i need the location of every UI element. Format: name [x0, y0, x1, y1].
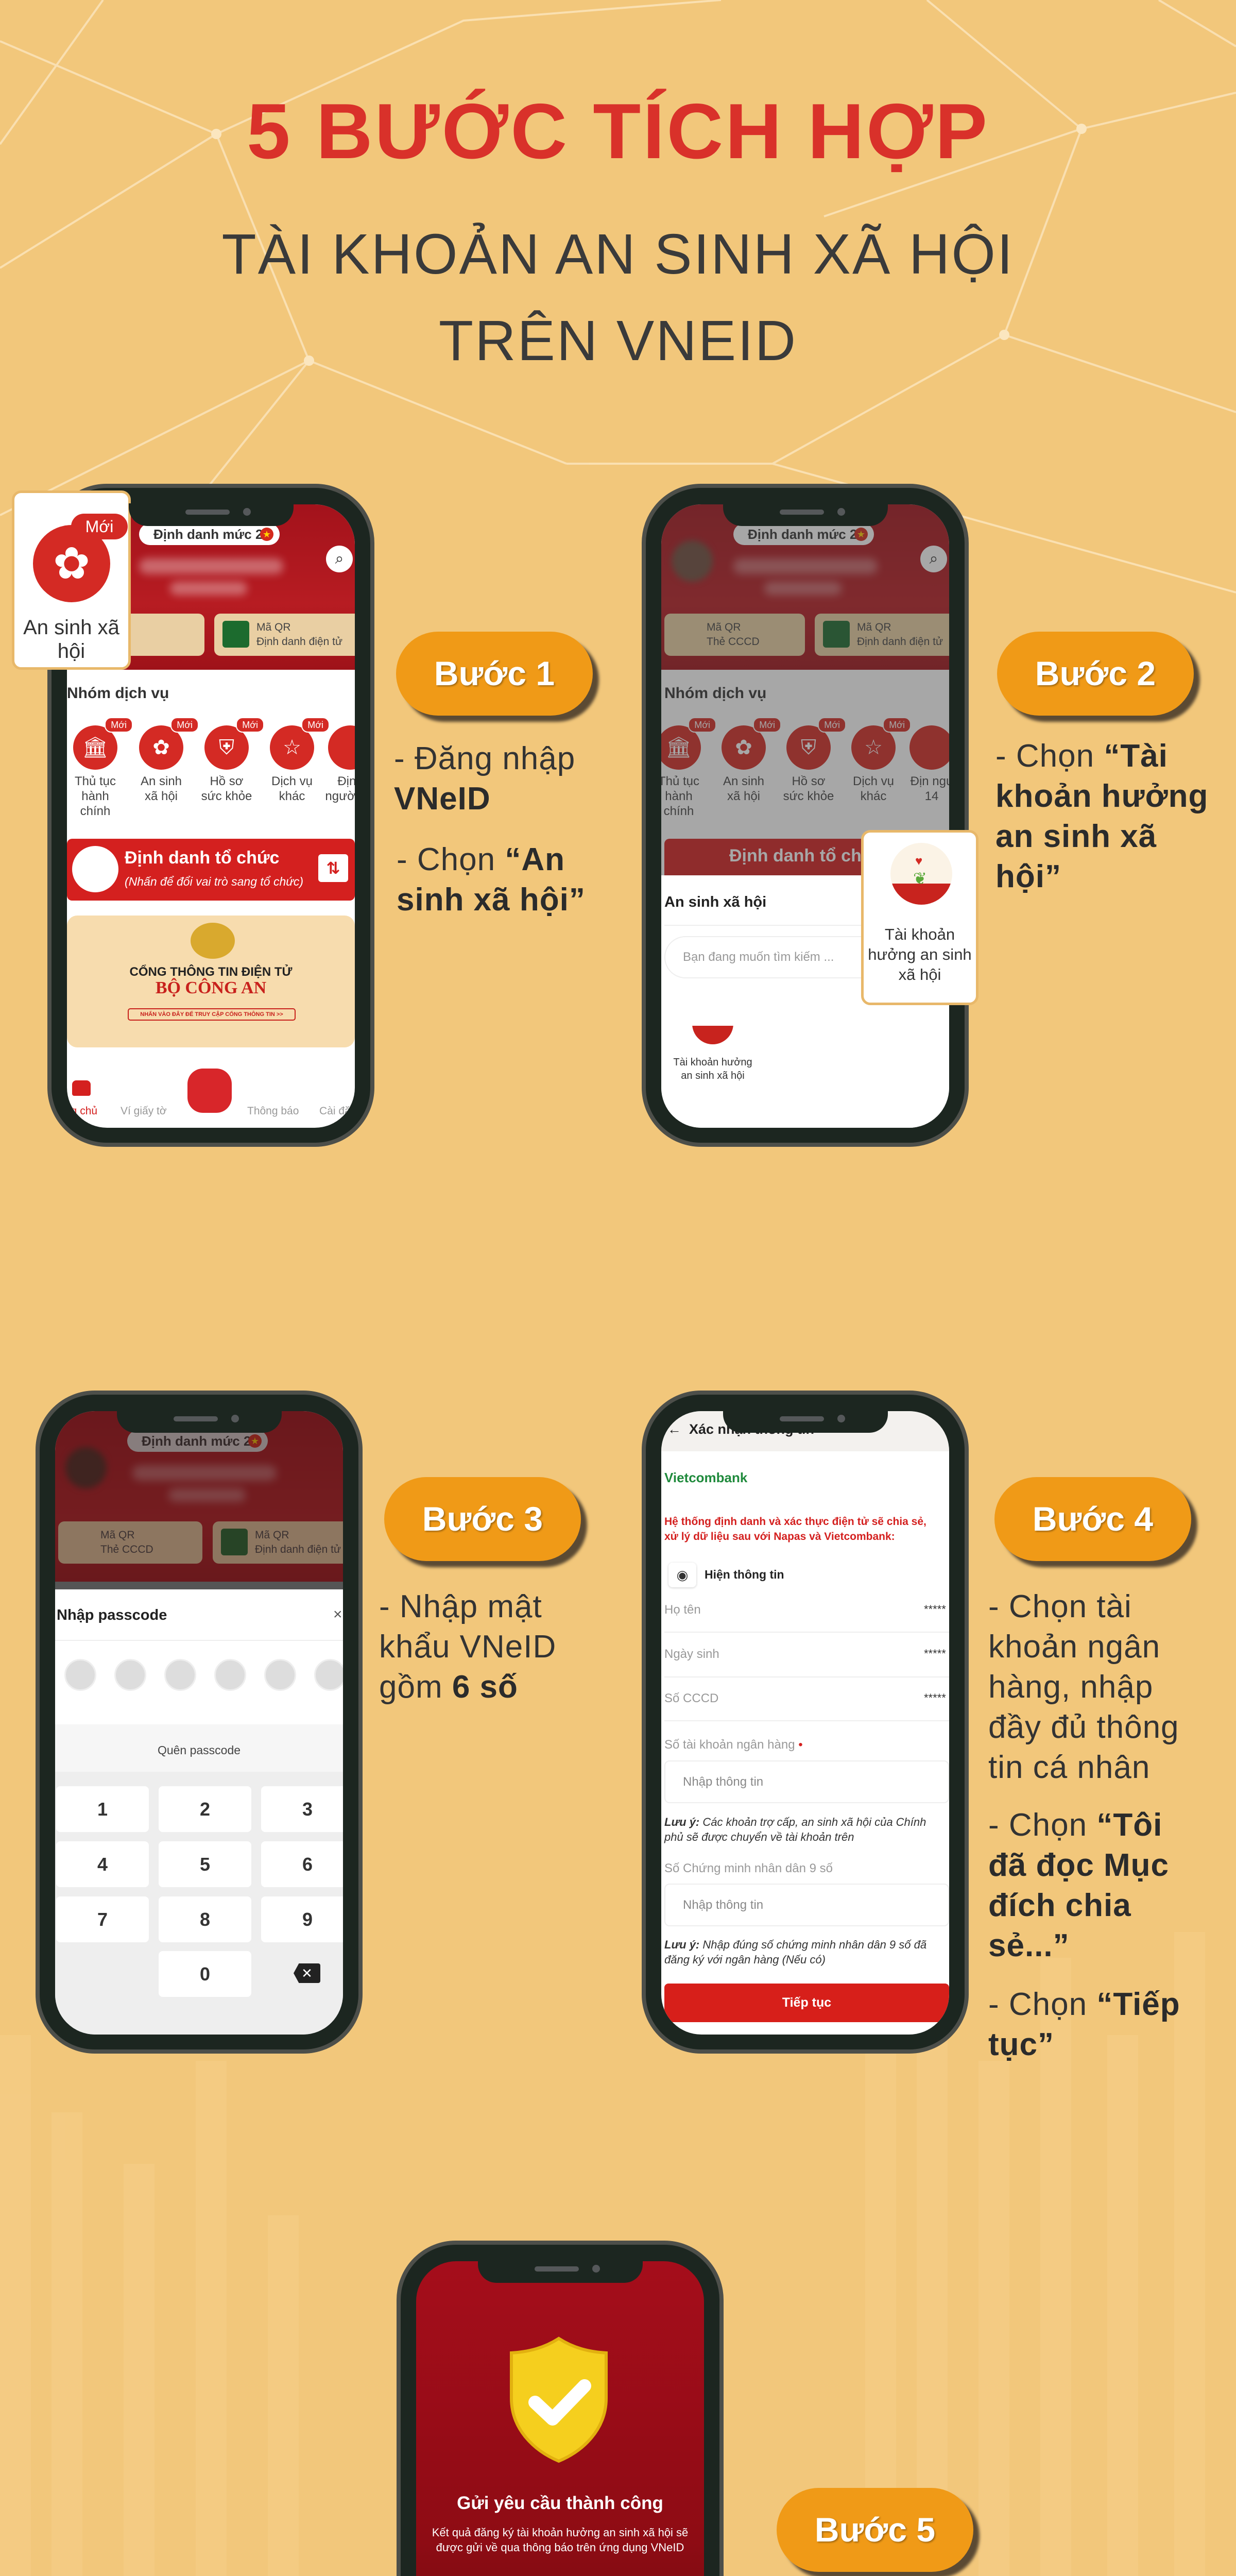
- phone 3: Thẻ CCCD: [100, 1544, 153, 1555]
- phone 1: 🏛: [82, 736, 108, 759]
- bottom sheet: [661, 875, 949, 1128]
- text: - Chọn “Tôi: [988, 1807, 1162, 1843]
- phone 4: Tiếp tục: [782, 1995, 831, 2010]
- keypad: [55, 1772, 343, 2035]
- phone 1: Hồ sơ sức khỏe: [201, 774, 252, 803]
- text: step 4: [988, 1589, 1179, 1785]
- header red: CCCD: [89, 636, 120, 648]
- header red: ★: [263, 529, 271, 539]
- text: step 4: khoản ngân: [988, 1629, 1160, 1665]
- subtitle: TRÊN VNEID: [439, 309, 797, 372]
- phone 4: Họ tên: [664, 1603, 701, 1617]
- pill: buoc 4: [994, 1477, 1191, 1561]
- phone 2: ★: [857, 529, 865, 539]
- phone 2: Mới: [759, 720, 775, 730]
- text: step 2: - Chọn “Tài: [995, 738, 1168, 774]
- phone 4: phủ sẽ được chuyển về tài khoản trên: [664, 1831, 854, 1843]
- phone 3: [36, 1391, 363, 2054]
- text: step 4: tin cá nhân: [988, 1750, 1150, 1785]
- icon: shield: [510, 2337, 608, 2463]
- phone 2: Mã QR: [857, 621, 891, 633]
- text: step 1: - Đăng nhập: [394, 741, 575, 776]
- red banner: Định danh tổ chức: [125, 848, 279, 868]
- keypad: 0: [200, 1963, 210, 1985]
- phone 1: An sinh xã hội: [141, 774, 182, 803]
- portal banner: NHẤN VÀO ĐÂY ĐỂ TRUY CẬP CỔNG THÔNG TIN >>: [140, 1011, 283, 1018]
- red banner: (Nhấn để đổi vai trò sang tổ chức): [125, 875, 303, 888]
- phone 2: ☆: [864, 736, 883, 759]
- phone 4: đăng ký với ngân hàng (Nếu có): [664, 1953, 826, 1966]
- keypad: ✕: [301, 1965, 313, 1981]
- callout: tai khoan huong an sinh: xã hội: [899, 965, 941, 984]
- header red: Định danh điện tử: [256, 636, 342, 648]
- pill: buoc 3: [384, 1477, 581, 1561]
- phone 4: *****: [924, 1603, 946, 1616]
- phone 1: Mới: [307, 720, 323, 730]
- text: - Chọn “Tiếp: [988, 1987, 1180, 2022]
- text: step 3: - Nhập mật: [379, 1589, 542, 1624]
- subtitle: TÀI KHOẢN AN SINH XÃ HỘI: [222, 223, 1014, 286]
- header red: ⌕: [335, 550, 344, 567]
- portal banner: BỘ CÔNG AN: [156, 978, 266, 997]
- keypad: 9: [302, 1909, 313, 1930]
- phone 1: [47, 484, 374, 1147]
- pill: buoc 1: Bước 1: [434, 654, 555, 692]
- phone 2: Mã QR: [707, 621, 741, 633]
- phone 2: Nhóm dịch vụ: [664, 685, 766, 702]
- red banner: [67, 839, 355, 901]
- phone 4: Nhập thông tin: [683, 1898, 763, 1912]
- phone 4: ◉: [677, 1567, 688, 1583]
- keypad: 6: [302, 1854, 313, 1875]
- phone 4: xử lý dữ liệu sau với Napas và Vietcombank:: [664, 1531, 895, 1543]
- phone 4: ← Xác nhận thông tin: [667, 1421, 814, 1437]
- keypad: 1: [97, 1799, 108, 1820]
- keypad: 5: [200, 1854, 210, 1875]
- red banner: ⇅: [327, 859, 340, 877]
- callout: tai khoan huong an sinh: Tài khoản: [885, 925, 955, 943]
- pill: buoc 2: Bước 2: [1035, 654, 1156, 692]
- phone 2: Định danh mức 2: [748, 527, 857, 542]
- phone 2: ⛨: [801, 736, 816, 759]
- callout: tai khoan huong an sinh: [861, 830, 978, 1005]
- keypad: 3: [302, 1799, 313, 1820]
- pill: buoc 4: Bước 4: [1033, 1500, 1153, 1538]
- phone 1: Mới: [111, 720, 127, 730]
- keypad: 4: [97, 1854, 108, 1875]
- text: sẻ...”: [988, 1928, 1070, 1963]
- portal banner: [67, 916, 355, 1047]
- keypad: 8: [200, 1909, 210, 1930]
- phone 2: An sinh xã hội: [723, 774, 764, 803]
- phone 5: [397, 2241, 724, 2576]
- phone 4: Nhập thông tin: [683, 1775, 763, 1789]
- phone 5: được gửi về qua thông báo trên ứng dụng VNeID: [436, 2541, 684, 2554]
- phone 4: [642, 1391, 969, 2054]
- dim overlay: [661, 504, 949, 875]
- title: 5 BƯỚC TÍCH HỢP: [247, 88, 989, 175]
- bottom sheet: Tài khoản hưởng an sinh xã hội: [673, 1057, 752, 1081]
- phone 1: Dịch vụ khác: [271, 774, 313, 803]
- header red: Định danh mức 2: [153, 527, 263, 542]
- phone 2: Hồ sơ sức khỏe: [783, 774, 834, 803]
- phone 3: ×: [333, 1606, 342, 1623]
- phone 3: Mã QR: [255, 1529, 289, 1541]
- phone 2: Mới: [889, 720, 905, 730]
- phone 1: Mới: [242, 720, 258, 730]
- pill: buoc 5: Bước 5: [815, 2511, 935, 2549]
- phone 4: Lưu ý: Nhập đúng số chứng minh nhân dân 9 số đã: [664, 1938, 926, 1951]
- text: step 3: [379, 1589, 556, 1705]
- pill: buoc 5: [777, 2488, 973, 2572]
- header red: [67, 504, 355, 670]
- bottom nav: Cài đặ: [319, 1105, 351, 1117]
- pill: buoc 2: [997, 632, 1194, 716]
- bottom nav: Ví giấy tờ: [121, 1105, 167, 1117]
- background building pattern: [0, 1803, 1236, 2576]
- phone 1: ✿: [152, 736, 170, 759]
- phone 2: [642, 484, 969, 1147]
- pill: buoc 1: [396, 632, 593, 716]
- phone 5: Kết quả đăng ký tài khoản hưởng an sinh xã hội sẽ: [432, 2526, 688, 2539]
- phone 4: Hệ thống định danh và xác thực điện tử sẽ chia sẻ,: [664, 1516, 926, 1528]
- phone 2: Định danh tổ chức: [729, 846, 884, 866]
- phone 2: Mới: [694, 720, 710, 730]
- callout: an sinh xa hoi icon: ✿: [53, 539, 90, 588]
- text: step 2: [995, 738, 1208, 894]
- phone 4: Lưu ý: Các khoản trợ cấp, an sinh xã hội của Chính: [664, 1816, 926, 1828]
- phone 1: Thủ tục hành chính: [75, 774, 116, 818]
- bottom nav: Thông báo: [247, 1105, 299, 1117]
- phone 1: Nhóm dịch vụ: [67, 685, 169, 702]
- callout: tai khoan huong an sinh: hưởng an sinh: [868, 945, 972, 963]
- text: step 4: - Chọn tài: [988, 1589, 1132, 1624]
- callout: an sinh xa hoi icon: [12, 490, 131, 670]
- phone 4: Số Chứng minh nhân dân 9 số: [664, 1861, 833, 1875]
- phone 4: Vietcombank: [664, 1470, 747, 1485]
- text: - Chọn “An: [397, 842, 565, 877]
- phone 3: Định danh mức 2: [142, 1433, 251, 1449]
- bottom sheet: Bạn đang muốn tìm kiếm ...: [683, 950, 834, 964]
- phone 1: Mới: [177, 720, 193, 730]
- phone 2: Thẻ CCCD: [707, 636, 760, 648]
- callout: tai khoan huong an sinh: ♥: [915, 854, 922, 868]
- phone 3: ★: [251, 1436, 259, 1446]
- text: step 4: hàng, nhập: [988, 1669, 1153, 1705]
- phone 4: *****: [924, 1647, 946, 1660]
- phone 5: Gửi yêu cầu thành công: [457, 2493, 663, 2513]
- bottom nav: [67, 1069, 351, 1117]
- pill: buoc 3: Bước 3: [422, 1500, 543, 1538]
- phone 2: ✿: [735, 736, 752, 759]
- text: step 3: khẩu VNeID: [379, 1629, 556, 1665]
- phone 4: Ngày sinh: [664, 1647, 719, 1661]
- bottom sheet: An sinh xã hội: [664, 894, 766, 910]
- callout: an sinh xa hoi icon: hội: [58, 640, 85, 663]
- text: step 1: [394, 741, 575, 817]
- text: đã đọc Mục: [988, 1848, 1169, 1883]
- callout: an sinh xa hoi icon: An sinh xã: [23, 616, 119, 639]
- phone 4: Hiện thông tin: [705, 1568, 784, 1581]
- background network lines: [0, 0, 1236, 594]
- callout: tai khoan huong an sinh: ❦: [913, 869, 927, 888]
- text: step 4: đầy đủ thông: [988, 1709, 1179, 1745]
- phone 2: Dịch vụ khác: [853, 774, 894, 803]
- phone 2: Định danh điện tử: [857, 636, 943, 648]
- phone 1: ☆: [283, 736, 301, 759]
- phone 4: *****: [924, 1691, 946, 1704]
- phone 4: Số CCCD: [664, 1691, 718, 1705]
- phone 3: Quên passcode: [158, 1743, 241, 1757]
- phone 3: Mã QR: [100, 1529, 135, 1541]
- text: đích chia: [988, 1888, 1131, 1923]
- text: step 2: an sinh xã: [995, 819, 1157, 854]
- keypad: 7: [97, 1909, 108, 1930]
- text: step 2: khoản hưởng: [995, 778, 1208, 814]
- phone 2: ⌕: [930, 550, 938, 567]
- text: step 2: hội”: [995, 859, 1061, 894]
- keypad: 2: [200, 1799, 210, 1820]
- text: sinh xã hội”: [397, 882, 586, 918]
- phone 2: Mới: [824, 720, 840, 730]
- text: tục”: [988, 2027, 1054, 2062]
- header red: R: [89, 621, 96, 633]
- callout: an sinh xa hoi icon: Mới: [85, 517, 113, 536]
- phone 3: Nhập passcode: [57, 1607, 167, 1623]
- subtitle: [222, 223, 1014, 372]
- phone 4: Số tài khoản ngân hàng •: [664, 1738, 803, 1752]
- phone 1: ⛨: [219, 736, 234, 759]
- header red: Mã QR: [256, 621, 291, 633]
- text: step 3: gồm 6 số: [379, 1669, 518, 1705]
- text: step 1: VNeID: [394, 781, 491, 817]
- phone 2: 🏛: [666, 736, 692, 759]
- phone 3: Định danh điện tử: [255, 1544, 341, 1555]
- portal banner: CỔNG THÔNG TIN ĐIỆN TỬ: [130, 965, 292, 979]
